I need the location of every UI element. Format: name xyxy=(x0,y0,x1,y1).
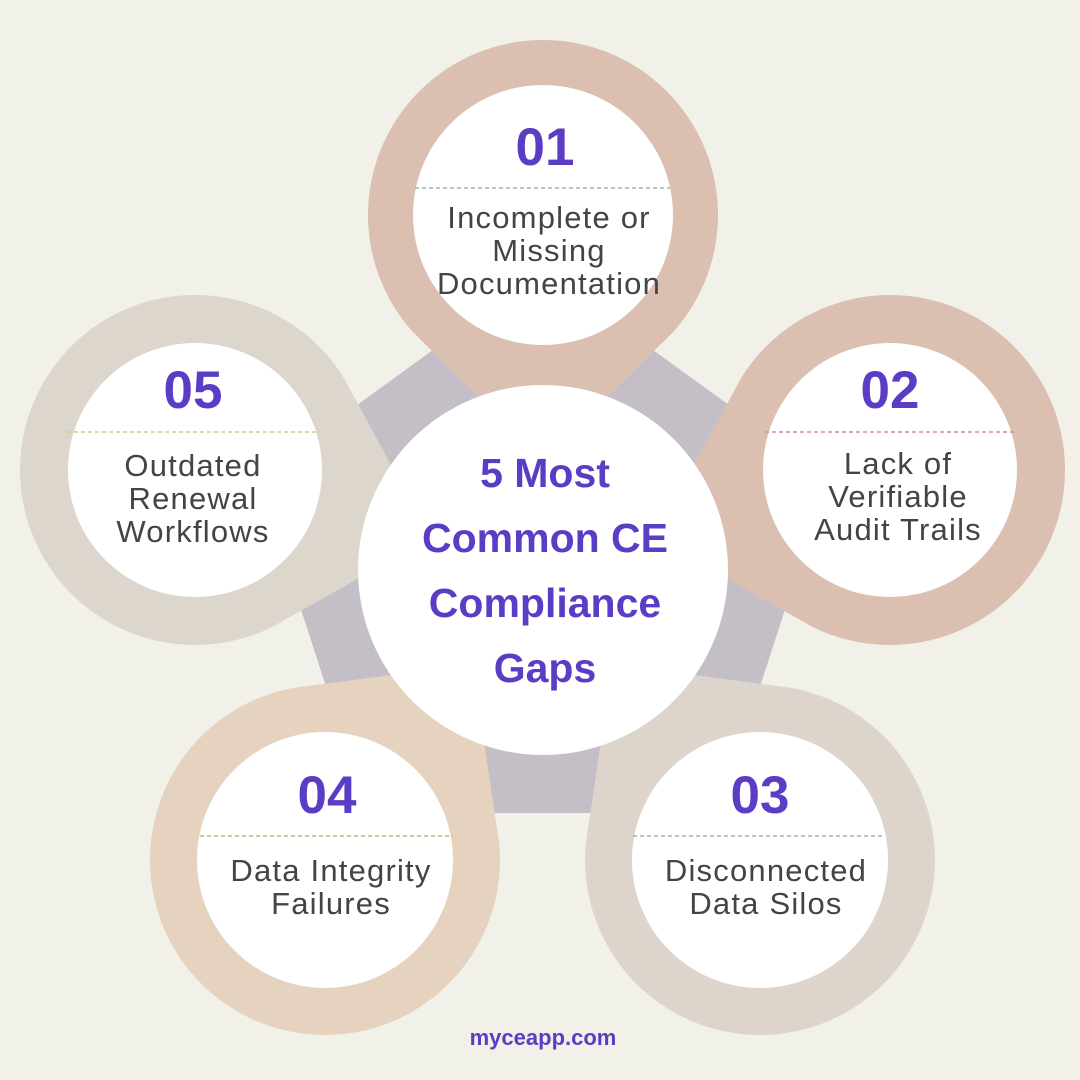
petal 01: 01 xyxy=(516,118,574,177)
petal 01: Incomplete or xyxy=(447,200,651,235)
petal 01: Missing xyxy=(492,233,606,268)
center title circle xyxy=(358,385,728,755)
petal 02 xyxy=(606,254,1080,706)
petal 02: 02 xyxy=(861,361,919,420)
petal 04: Failures xyxy=(271,886,391,921)
petal 01 xyxy=(368,40,718,460)
petal 04: Data Integrity xyxy=(230,853,432,888)
petal 05: Renewal xyxy=(128,481,258,516)
petal 01: Documentation xyxy=(437,266,661,301)
center title circle: 5 Most xyxy=(480,450,610,496)
petal 03: Disconnected xyxy=(665,853,867,888)
petal 05: Outdated xyxy=(124,448,262,483)
petal 04 xyxy=(80,559,612,1080)
footer url: myceapp.com xyxy=(470,1025,616,1050)
petal 02: Lack of xyxy=(844,446,952,481)
petal 02: Verifiable xyxy=(828,479,968,514)
petal 03: 03 xyxy=(731,766,789,825)
petal 05: 05 xyxy=(164,361,222,420)
center title circle: Compliance xyxy=(429,580,661,626)
petal 04: 04 xyxy=(298,766,357,825)
petal 03 xyxy=(473,559,1005,1080)
petal 05: Workflows xyxy=(116,514,270,549)
petal 03: Data Silos xyxy=(689,886,843,921)
center title circle: Gaps xyxy=(494,645,596,691)
center title circle: Common CE xyxy=(422,515,668,561)
petal 02: Audit Trails xyxy=(814,512,982,547)
petal 05 xyxy=(0,254,479,706)
pentagon background xyxy=(258,270,828,813)
